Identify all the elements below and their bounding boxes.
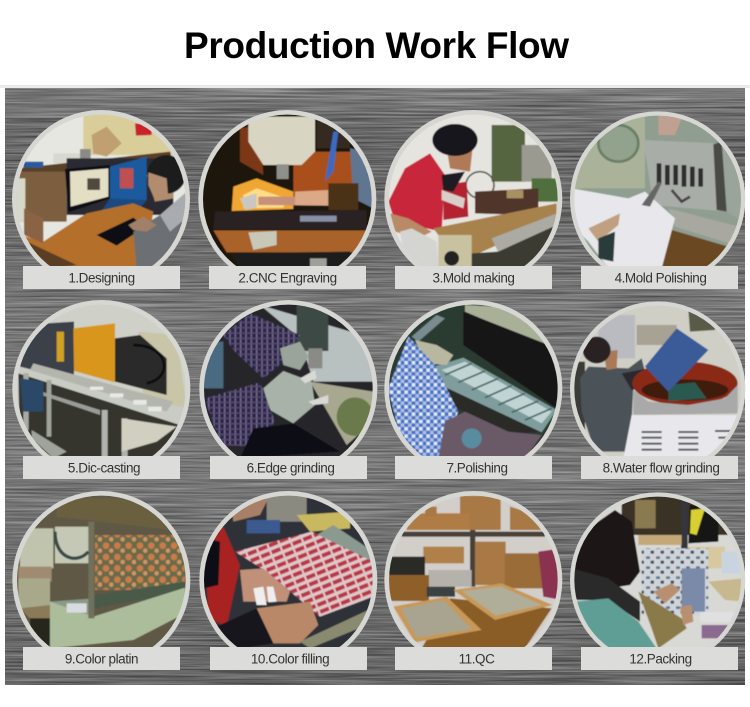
label: 5.Dic-casting: 5.Dic-casting (68, 460, 140, 476)
photo: plating line (12, 491, 190, 647)
title: Production Work Flow (184, 25, 569, 66)
label: 7.Polishing: 7.Polishing (446, 460, 508, 476)
photo: woman packing products (570, 492, 746, 647)
photo: polishing spoons on a bar (384, 300, 562, 456)
label: 3.Mold making (395, 266, 552, 289)
step 6: edge grinding (199, 300, 380, 479)
label: 11.QC (395, 647, 552, 670)
photo: gloved hands at drill (199, 300, 378, 456)
step 10: color filling (199, 491, 380, 670)
step 12: packing (568, 492, 748, 670)
label: 6.Edge grinding: 6.Edge grinding (247, 460, 334, 476)
step 7: polishing (382, 300, 562, 479)
label: 9.Color platin (23, 647, 180, 670)
step 11: QC (382, 491, 562, 670)
label: 12.Packing: 12.Packing (629, 652, 692, 666)
photo: worker pouring into a tumbler (570, 301, 746, 456)
label: 1.Designing: 1.Designing (68, 270, 135, 286)
label: 5.Dic-casting (23, 456, 180, 479)
step 8: water flow grinding (568, 301, 748, 479)
label: 12.Packing (581, 647, 738, 670)
label: 2.CNC Engraving (209, 266, 366, 289)
step 5: die-casting (12, 300, 193, 479)
label: 3.Mold making: 3.Mold making (433, 270, 514, 286)
photo: worker at milling machine (384, 110, 562, 266)
photo: CNC machine (198, 110, 376, 266)
photo: die-casting machine and conveyor (12, 300, 190, 456)
label: 8.Water flow grinding (581, 456, 738, 479)
photo: stacks of wooden frames (384, 491, 562, 647)
photo: designer at computer (12, 110, 190, 266)
step 2: CNC engraving (198, 110, 377, 289)
label: 4.Mold Polishing (581, 266, 738, 289)
photo: hands filling a red tray (199, 491, 378, 647)
label: 9.Color platin: 9.Color platin (65, 652, 138, 666)
step 4: mold polishing (568, 111, 748, 289)
label: 8.Water flow grinding: 8.Water flow grinding (603, 460, 719, 476)
label: 6.Edge grinding (210, 456, 367, 479)
label: 4.Mold Polishing: 4.Mold Polishing (615, 270, 706, 286)
label: 2.CNC Engraving: 2.CNC Engraving (238, 270, 337, 286)
label: 11.QC: 11.QC (459, 652, 495, 666)
step 9: color plating (12, 491, 193, 670)
step 3: mold making (382, 110, 562, 289)
step 1: designing (12, 110, 193, 289)
label: 7.Polishing (395, 456, 552, 479)
photo: polishing a mold with white gloves (570, 111, 746, 266)
label: 10.Color filling (210, 647, 367, 670)
label: 1.Designing (23, 266, 180, 289)
label: 10.Color filling: 10.Color filling (251, 652, 329, 666)
